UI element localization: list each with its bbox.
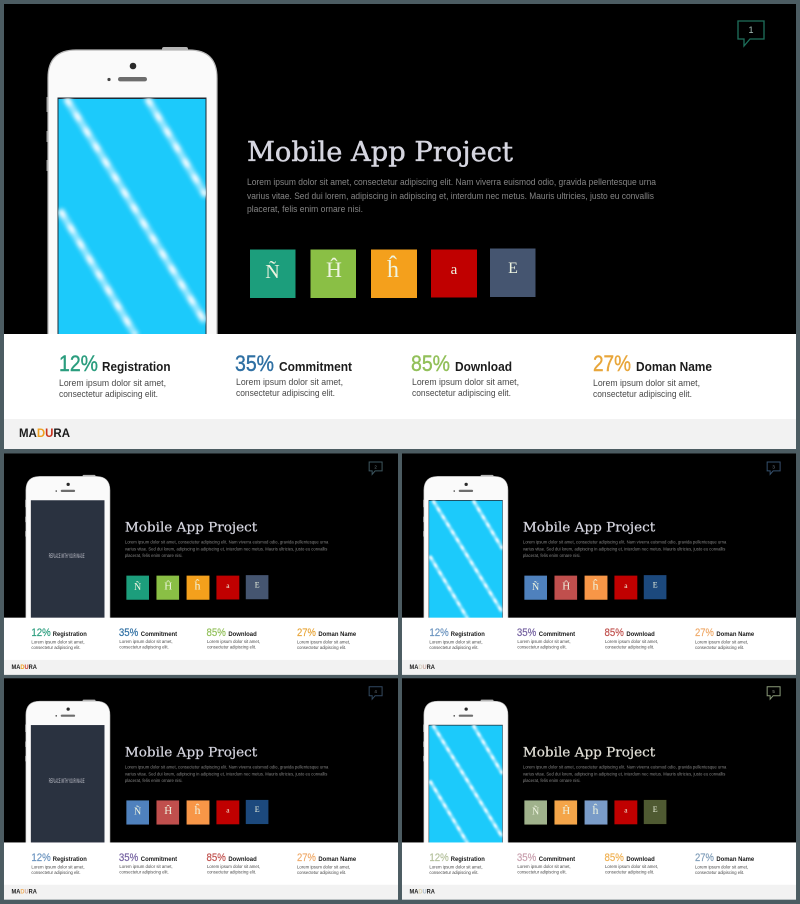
icon: speech bubble with slide number: 5 bbox=[772, 689, 775, 694]
footer with brand bbox=[402, 885, 796, 900]
stat: download: 85% bbox=[411, 351, 450, 376]
icon tiles bbox=[126, 575, 268, 600]
stats panel: 35% bbox=[517, 627, 536, 639]
stats panel: 12% bbox=[31, 627, 51, 639]
stat: registration: 12% bbox=[59, 351, 98, 376]
icon tiles: E bbox=[255, 580, 260, 589]
icon tiles: a bbox=[226, 581, 230, 590]
stats panel: consectetur adipiscing elit. bbox=[207, 869, 256, 875]
stats panel: consectetur adipiscing elit. bbox=[605, 869, 654, 875]
icon: speech bubble with slide number bbox=[738, 21, 764, 46]
slide 2 bbox=[4, 453, 398, 675]
stat: registration bbox=[59, 351, 170, 400]
stats panel: Doman Name bbox=[716, 856, 755, 863]
icon tiles: a bbox=[624, 806, 628, 815]
stats panel: consectetur adipiscing elit. bbox=[429, 645, 479, 651]
stats panel: Lorem ipsum dolor sit amet, bbox=[429, 640, 483, 646]
stats panel: 85% bbox=[206, 852, 226, 864]
dark hero background bbox=[402, 453, 796, 618]
stats panel: Registration bbox=[53, 631, 87, 638]
title: Mobile App Project bbox=[125, 745, 258, 760]
stats panel: Lorem ipsum dolor sit amet, bbox=[207, 639, 260, 645]
stat: domain name: 27% bbox=[593, 351, 631, 376]
description text: Lorem ipsum dolor sit amet, consectetur adipiscing elit. Nam viverra euismod odio, gravida pellentesque urna bbox=[523, 540, 727, 545]
stats panel: Lorem ipsum dolor sit amet, bbox=[207, 864, 260, 870]
stat: domain name: Doman Name bbox=[636, 360, 712, 374]
description text bbox=[523, 540, 727, 558]
stats panel: consectetur adipiscing elit. bbox=[517, 645, 567, 651]
stats panel: Commitment bbox=[141, 856, 177, 863]
stats panel: 35% bbox=[517, 852, 536, 864]
stats panel: consectetur adipiscing elit. bbox=[207, 645, 256, 651]
footer with brand: MADURA bbox=[409, 890, 435, 896]
stats panel: Registration bbox=[451, 856, 485, 863]
stats panel: 35% bbox=[119, 627, 138, 639]
stats panel: Lorem ipsum dolor sit amet, bbox=[695, 640, 748, 646]
slide 1: main bbox=[4, 4, 796, 449]
stat: commitment: 35% bbox=[235, 351, 274, 376]
icon: speech bubble with slide number: 2 bbox=[374, 464, 377, 469]
stats panel: 35% bbox=[119, 852, 138, 864]
icon: speech bubble with slide number bbox=[369, 462, 382, 474]
icon tiles: E bbox=[653, 805, 658, 814]
description text bbox=[125, 764, 329, 783]
icon tiles: Ñ bbox=[532, 806, 539, 818]
stats panel: 85% bbox=[604, 852, 624, 864]
description text: placerat, felis enim ornare nisi. bbox=[247, 204, 363, 214]
icon tiles: Ĥ bbox=[164, 580, 172, 592]
icon tiles bbox=[126, 800, 268, 825]
stats panel: Doman Name bbox=[318, 631, 357, 638]
description text: placerat, felis enim ornare nisi. bbox=[523, 778, 581, 783]
stat: download: Lorem ipsum dolor sit amet, bbox=[412, 377, 519, 388]
stats panel: 27% bbox=[297, 627, 316, 639]
description text: varius vitae. Sed dui lorem, adipiscing in adipiscing et, interdum nec metus. Mauris ultricies, justo eu convallis bbox=[523, 771, 726, 776]
stats panel: Lorem ipsum dolor sit amet, bbox=[695, 864, 748, 870]
icon tiles: Ĥ bbox=[326, 257, 342, 282]
stats panel: 27% bbox=[695, 852, 714, 864]
icon: speech bubble with slide number bbox=[767, 687, 780, 699]
icon: speech bubble with slide number: 4 bbox=[374, 689, 377, 694]
slide 4 bbox=[4, 678, 398, 900]
stats panel: Lorem ipsum dolor sit amet, bbox=[605, 639, 658, 645]
stats panel: 12% bbox=[31, 852, 51, 864]
stats panel: 85% bbox=[604, 627, 624, 639]
stats panel: consectetur adipiscing elit. bbox=[517, 869, 567, 875]
icon tiles: ĥ bbox=[195, 803, 201, 817]
icon tiles: E bbox=[508, 260, 518, 277]
phone with placeholder screen bbox=[25, 700, 110, 845]
stats panel: Download bbox=[228, 856, 257, 863]
stats panel bbox=[402, 842, 796, 885]
description text: Lorem ipsum dolor sit amet, consectetur adipiscing elit. Nam viverra euismod odio, gravida pellentesque urna bbox=[125, 764, 329, 769]
stats panel: consectetur adipiscing elit. bbox=[429, 870, 479, 876]
icon tiles: ĥ bbox=[593, 803, 599, 817]
stats panel: Registration bbox=[53, 856, 87, 863]
icon tiles: Ĥ bbox=[562, 805, 570, 817]
stat: domain name: consectetur adipiscing elit. bbox=[593, 389, 692, 400]
phone with placeholder screen: REPLACE WITH YOUR IMAGE bbox=[49, 778, 85, 785]
stats panel: Lorem ipsum dolor sit amet, bbox=[119, 864, 173, 870]
icon tiles bbox=[524, 575, 666, 600]
dark hero background bbox=[4, 678, 398, 843]
stats panel: consectetur adipiscing elit. bbox=[119, 869, 169, 875]
stat: commitment bbox=[235, 351, 353, 399]
phone with blue screen bbox=[423, 475, 508, 621]
stat: registration: Registration bbox=[102, 360, 170, 374]
stats panel bbox=[4, 618, 398, 660]
stat: commitment: Lorem ipsum dolor sit amet, bbox=[236, 377, 343, 388]
stats panel: Lorem ipsum dolor sit amet, bbox=[429, 864, 483, 870]
footer with brand bbox=[4, 419, 796, 449]
stats panel: Lorem ipsum dolor sit amet, bbox=[517, 639, 571, 645]
stat: download: Download bbox=[455, 360, 512, 374]
stats panel bbox=[4, 842, 398, 885]
title: Mobile App Project bbox=[125, 521, 258, 536]
title: Mobile App Project bbox=[523, 745, 656, 760]
stats panel: Lorem ipsum dolor sit amet, bbox=[119, 639, 173, 645]
stats panel: 85% bbox=[206, 627, 226, 639]
stat: domain name: Lorem ipsum dolor sit amet, bbox=[593, 378, 700, 389]
icon tiles: a bbox=[226, 806, 230, 815]
stats panel: 27% bbox=[695, 627, 714, 639]
footer with brand: MADURA bbox=[11, 665, 37, 671]
icon tiles: Ĥ bbox=[562, 580, 570, 592]
description text: Lorem ipsum dolor sit amet, consectetur adipiscing elit. Nam viverra euismod odio, gravida pellentesque urna bbox=[523, 764, 727, 769]
stats panel bbox=[4, 334, 796, 420]
stats panel: Download bbox=[228, 631, 257, 638]
footer with brand bbox=[4, 660, 398, 675]
icon tiles: E bbox=[653, 580, 658, 589]
icon tiles: ĥ bbox=[195, 578, 201, 592]
stats panel: Lorem ipsum dolor sit amet, bbox=[31, 864, 85, 870]
description text: placerat, felis enim ornare nisi. bbox=[523, 553, 581, 558]
icon tiles bbox=[250, 248, 536, 298]
stats panel: Download bbox=[626, 631, 655, 638]
icon tiles bbox=[524, 800, 666, 825]
stats panel: 12% bbox=[429, 852, 449, 864]
icon tiles: E bbox=[255, 805, 260, 814]
description text: varius vitae. Sed dui lorem, adipiscing in adipiscing et, interdum nec metus. Mauris ultricies, justo eu convallis bbox=[247, 191, 654, 201]
footer with brand bbox=[4, 885, 398, 900]
stats panel: Lorem ipsum dolor sit amet, bbox=[31, 640, 85, 646]
stats panel: 27% bbox=[297, 852, 316, 864]
dark hero background bbox=[4, 453, 398, 618]
icon tiles: Ñ bbox=[134, 581, 141, 593]
stats panel: Doman Name bbox=[318, 856, 357, 863]
phone with placeholder screen bbox=[25, 475, 110, 621]
icon tiles: Ñ bbox=[134, 806, 141, 818]
stat: download: consectetur adipiscing elit. bbox=[412, 388, 511, 399]
stats panel: consectetur adipiscing elit. bbox=[297, 645, 346, 651]
stats panel: Download bbox=[626, 856, 655, 863]
description text: placerat, felis enim ornare nisi. bbox=[125, 553, 183, 558]
stats panel: Lorem ipsum dolor sit amet, bbox=[297, 864, 350, 870]
icon: speech bubble with slide number: 1 bbox=[748, 25, 754, 35]
footer with brand bbox=[402, 660, 796, 675]
stats panel: consectetur adipiscing elit. bbox=[605, 645, 654, 651]
stat: commitment: Commitment bbox=[279, 360, 353, 374]
stats panel: consectetur adipiscing elit. bbox=[31, 645, 81, 651]
phone with blue screen bbox=[46, 47, 217, 340]
title: Mobile App Project bbox=[523, 521, 656, 536]
title: Mobile App Project bbox=[247, 137, 513, 168]
stat: registration: Lorem ipsum dolor sit amet, bbox=[59, 378, 166, 389]
stats panel: consectetur adipiscing elit. bbox=[297, 870, 346, 876]
stat: commitment: consectetur adipiscing elit. bbox=[236, 388, 335, 399]
icon tiles: Ñ bbox=[265, 259, 280, 283]
stats panel: consectetur adipiscing elit. bbox=[119, 645, 169, 651]
dark hero background bbox=[4, 4, 796, 335]
stats panel: Lorem ipsum dolor sit amet, bbox=[605, 864, 658, 870]
icon tiles: a bbox=[624, 581, 628, 590]
slide 3 bbox=[402, 453, 796, 675]
stats panel: Registration bbox=[451, 631, 485, 638]
icon tiles: ĥ bbox=[387, 256, 399, 283]
description text bbox=[125, 540, 329, 558]
stat: domain name bbox=[593, 351, 712, 400]
stat: registration: consectetur adipiscing elit. bbox=[59, 389, 158, 400]
stats panel: Lorem ipsum dolor sit amet, bbox=[517, 864, 571, 870]
stats panel: consectetur adipiscing elit. bbox=[695, 870, 744, 876]
description text: varius vitae. Sed dui lorem, adipiscing in adipiscing et, interdum nec metus. Mauris ultricies, justo eu convallis bbox=[125, 547, 328, 552]
stats panel: consectetur adipiscing elit. bbox=[31, 870, 81, 876]
footer with brand: MADURA bbox=[11, 890, 37, 896]
icon tiles: Ñ bbox=[532, 581, 539, 593]
icon tiles: a bbox=[451, 262, 458, 278]
description text: varius vitae. Sed dui lorem, adipiscing in adipiscing et, interdum nec metus. Mauris ultricies, justo eu convallis bbox=[523, 547, 726, 552]
stats panel: Commitment bbox=[141, 631, 177, 638]
icon: speech bubble with slide number: 3 bbox=[772, 464, 775, 469]
stats panel: 12% bbox=[429, 627, 449, 639]
slide 5 bbox=[402, 678, 796, 900]
description text: varius vitae. Sed dui lorem, adipiscing in adipiscing et, interdum nec metus. Mauris ultricies, justo eu convallis bbox=[125, 771, 328, 776]
icon tiles: Ĥ bbox=[164, 805, 172, 817]
stats panel bbox=[402, 618, 796, 660]
phone with placeholder screen: REPLACE WITH YOUR IMAGE bbox=[49, 553, 85, 560]
icon tiles: ĥ bbox=[593, 578, 599, 592]
icon: speech bubble with slide number bbox=[767, 462, 780, 474]
dark hero background bbox=[402, 678, 796, 843]
description text bbox=[247, 177, 656, 214]
stats panel: Commitment bbox=[539, 631, 575, 638]
footer with brand: MADURA bbox=[19, 426, 70, 440]
stats panel: Lorem ipsum dolor sit amet, bbox=[297, 640, 350, 646]
description text: Lorem ipsum dolor sit amet, consectetur adipiscing elit. Nam viverra euismod odio, gravida pellentesque urna bbox=[247, 177, 656, 187]
icon: speech bubble with slide number bbox=[369, 687, 382, 699]
description text bbox=[523, 764, 727, 783]
footer with brand: MADURA bbox=[409, 665, 435, 671]
stats panel: consectetur adipiscing elit. bbox=[695, 645, 744, 651]
phone with blue screen bbox=[423, 700, 508, 845]
stat: download bbox=[411, 351, 519, 399]
stats panel: Commitment bbox=[539, 856, 575, 863]
description text: Lorem ipsum dolor sit amet, consectetur adipiscing elit. Nam viverra euismod odio, gravida pellentesque urna bbox=[125, 540, 329, 545]
description text: placerat, felis enim ornare nisi. bbox=[125, 778, 183, 783]
stats panel: Doman Name bbox=[716, 631, 755, 638]
